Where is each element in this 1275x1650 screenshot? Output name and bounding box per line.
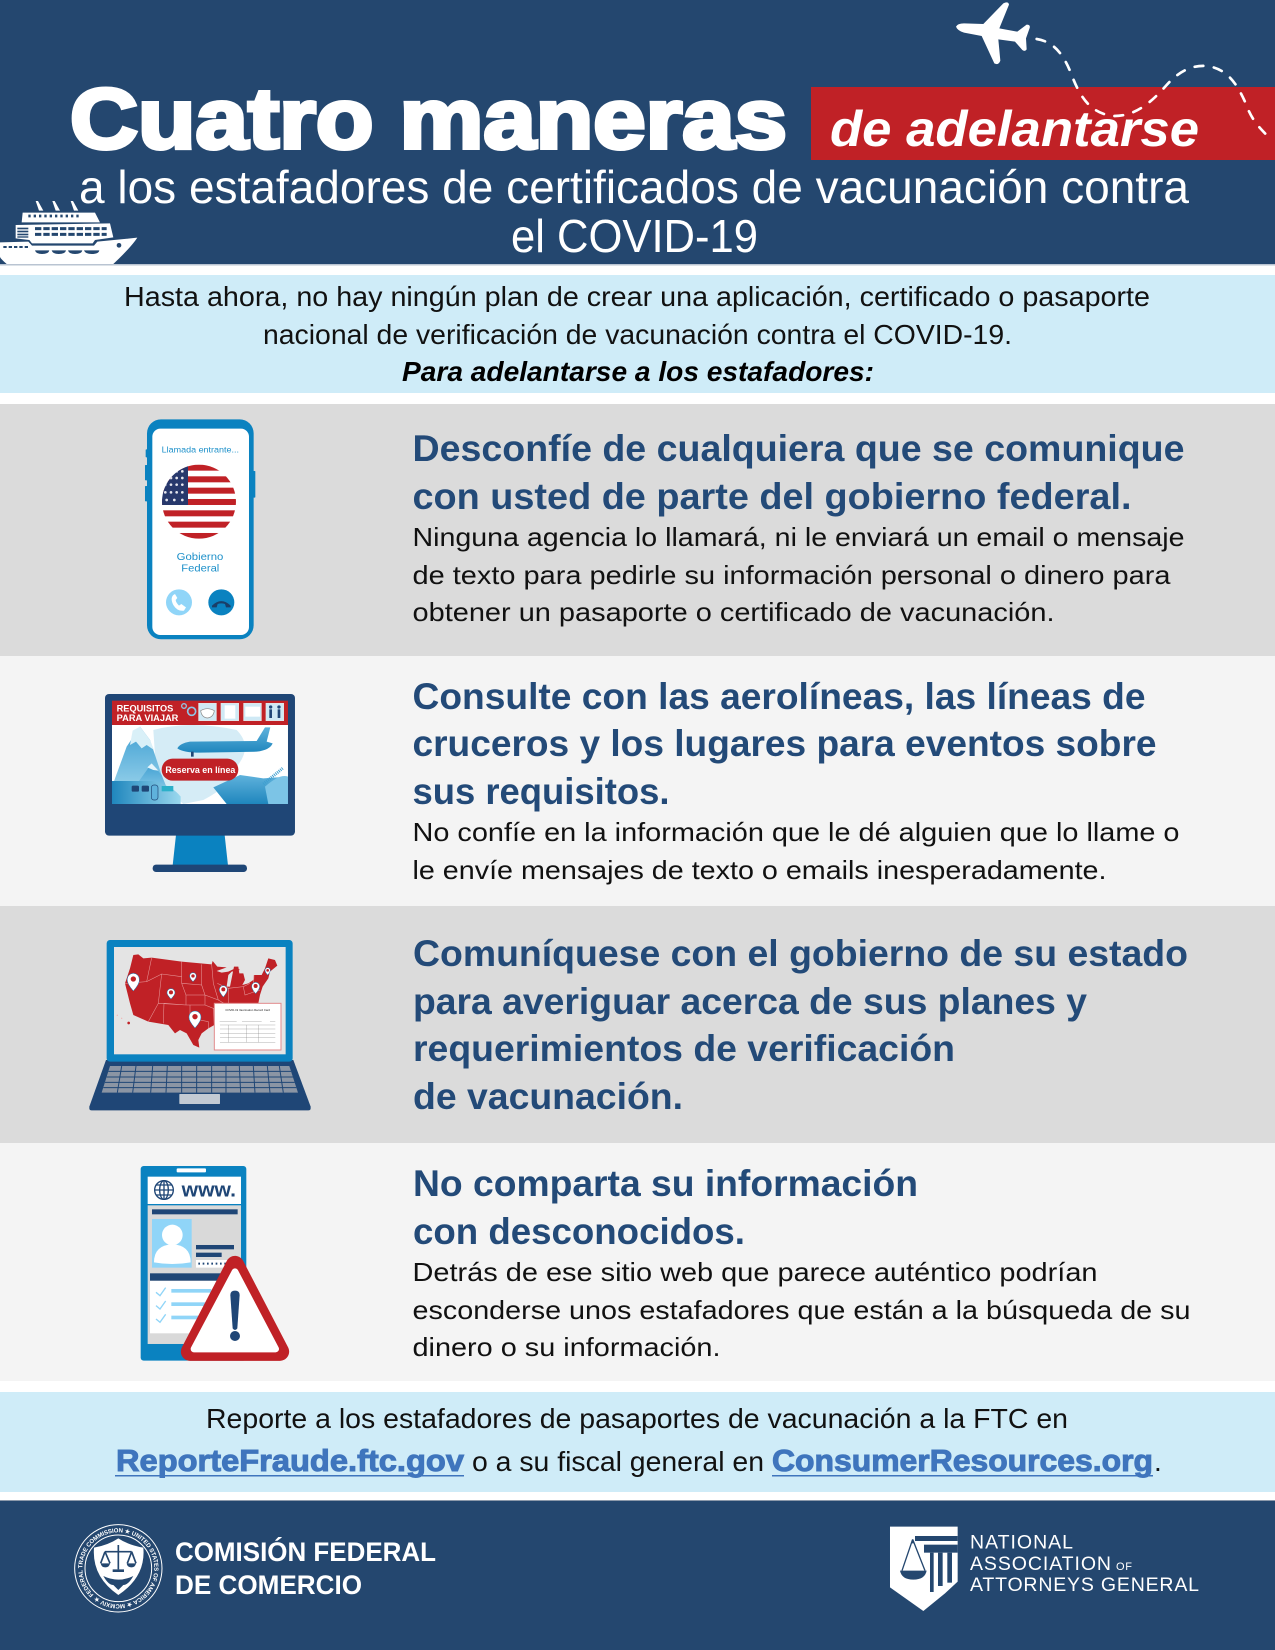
FTC name — [175, 1536, 436, 1600]
subtitle: a los estafadores de certificados de vacunación contra — [79, 161, 1189, 213]
panel: report band: . — [1154, 1446, 1162, 1477]
icon: desktop monitor: PARA VIAJAR — [117, 713, 179, 723]
heading — [412, 676, 1156, 812]
panel: row 3 — [0, 906, 1275, 1143]
heading — [412, 428, 1184, 517]
US map — [117, 954, 277, 1048]
panel: introduction: Para adelantarse a los estafadores: — [402, 356, 874, 387]
header band — [0, 0, 1275, 264]
icon: desktop monitor: Reserva en línea — [165, 765, 236, 775]
panel: row 1 — [0, 404, 1275, 656]
map pins — [127, 968, 270, 1028]
NAAG name — [970, 1532, 1199, 1596]
icon: phone call: Gobierno — [177, 552, 223, 563]
body text: dinero o su información. — [412, 1332, 720, 1362]
subtitle — [79, 161, 1189, 262]
booking button — [162, 759, 238, 781]
body text: esconderse unos estafadores que están a la búsqueda de su — [412, 1295, 1190, 1325]
body text: No confíe en la información que le dé alguien que lo llame o — [412, 817, 1180, 847]
title: Cuatro maneras — [70, 72, 787, 167]
heading — [413, 933, 1188, 1117]
heading: Comuníquese con el gobierno de su estado — [413, 933, 1188, 974]
body text — [412, 1257, 1190, 1362]
heading: No comparta su información — [413, 1163, 918, 1204]
panel: introduction — [0, 275, 1275, 393]
panel: report band: o a su fiscal general en — [472, 1446, 764, 1477]
heading: requerimientos de verificación — [413, 1028, 955, 1069]
icon: phone call: Federal — [181, 563, 219, 574]
icon: desktop monitor: REQUISITOS — [117, 703, 173, 713]
icon: phone call — [145, 419, 255, 639]
link: ConsumerResources: ConsumerResources.org — [772, 1443, 1153, 1478]
logo: NAAG shield — [890, 1527, 958, 1611]
heading: cruceros y los lugares para eventos sobre — [412, 723, 1156, 764]
heading — [413, 1163, 918, 1252]
icon: phone website with warning: www. — [181, 1179, 236, 1202]
heading: con usted de parte del gobierno federal. — [412, 476, 1132, 517]
banner text: de adelantarse — [830, 101, 1199, 157]
panel: introduction: nacional de verificación de vacunación contra el COVID-19. — [263, 319, 1012, 350]
body text: de texto para pedirle su información personal o dinero para — [412, 560, 1171, 590]
body text — [412, 522, 1184, 627]
icon: laptop with map — [89, 940, 311, 1110]
heading: Consulte con las aerolíneas, las líneas de — [412, 676, 1146, 717]
icon: phone call: Llamada entrante... — [162, 445, 239, 455]
icon: airplane with dashed route — [956, 2, 1268, 137]
warning triangle — [190, 1265, 280, 1352]
vaccination card — [214, 1003, 281, 1050]
vaccination card: COVID-19 Vaccination Record Card — [225, 1008, 270, 1012]
NAAG name: ASSOCIATION — [970, 1553, 1111, 1575]
red banner — [811, 87, 1275, 160]
link: ReporteFraude: ReporteFraude.ftc.gov — [116, 1443, 465, 1478]
panel: row 2 — [0, 656, 1275, 906]
body text — [412, 817, 1180, 885]
panel: report band: Reporte a los estafadores de pasaportes de vacunación a la FTC en — [206, 1403, 1068, 1434]
icon: cruise ship — [0, 201, 137, 264]
icon: phone website with warning — [141, 1166, 280, 1361]
panel: introduction: Hasta ahora, no hay ningún plan de crear una aplicación, certificado o pasaporte — [124, 281, 1150, 312]
NAAG name: OF — [1116, 1561, 1132, 1573]
body text: Detrás de ese sitio web que parece auténtico podrían — [412, 1257, 1098, 1287]
footer band — [0, 1500, 1275, 1650]
body text: obtener un pasaporte o certificado de vacunación. — [412, 597, 1054, 627]
body text: le envíe mensajes de texto o emails inesperadamente. — [412, 855, 1106, 885]
heading: para averiguar acerca de sus planes y — [413, 981, 1087, 1022]
panel: report band — [0, 1392, 1275, 1492]
body text: Ninguna agencia lo llamará, ni le enviará un email o mensaje — [412, 522, 1184, 552]
FTC name: DE COMERCIO — [175, 1570, 362, 1600]
heading: con desconocidos. — [413, 1211, 745, 1252]
icon: desktop monitor — [105, 694, 295, 872]
NAAG name: NATIONAL — [970, 1532, 1073, 1554]
logo: FTC seal: FEDERAL TRADE COMMISSION ★ UNITED STATES OF AMERICA ★ MCMXIV ★ — [78, 1528, 158, 1608]
NAAG name: ATTORNEYS GENERAL — [970, 1574, 1199, 1596]
heading: Desconfíe de cualquiera que se comunique — [412, 428, 1184, 469]
FTC name: COMISIÓN FEDERAL — [175, 1536, 436, 1567]
keyboard — [102, 1066, 298, 1093]
subtitle: el COVID-19 — [511, 210, 758, 262]
panel: row 4 — [0, 1143, 1275, 1381]
heading: sus requisitos. — [412, 771, 670, 812]
heading: de vacunación. — [413, 1076, 683, 1117]
